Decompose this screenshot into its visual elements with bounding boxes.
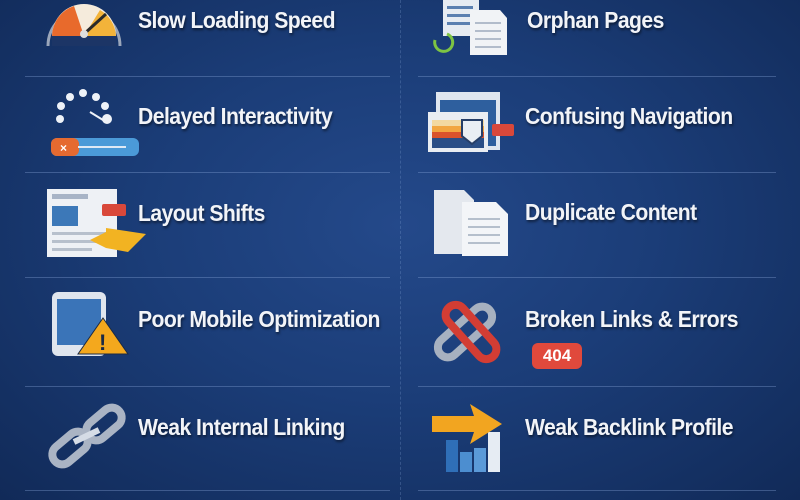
title: Orphan Pages: Orphan Pages	[527, 7, 664, 33]
icon: duplicate content	[434, 190, 508, 256]
title: Slow Loading Speed: Slow Loading Speed	[138, 7, 335, 33]
icon: confusing navigation	[428, 92, 514, 152]
icon: mobile warning	[52, 292, 129, 356]
title: Duplicate Content: Duplicate Content	[525, 199, 697, 225]
badge: 404: 404	[543, 346, 571, 365]
title: Weak Backlink Profile: Weak Backlink Profile	[525, 414, 733, 440]
icon: speedometer	[46, 4, 122, 46]
icon: chain links	[48, 404, 126, 468]
icon: delayed interactivity	[51, 89, 139, 156]
icon: orphan pages	[433, 0, 507, 55]
title: Confusing Navigation: Confusing Navigation	[525, 103, 733, 129]
icon: layout shifts	[47, 189, 146, 257]
badge: 404	[532, 343, 582, 369]
icon: mobile warning: !	[99, 330, 106, 355]
title: Layout Shifts: Layout Shifts	[138, 200, 265, 226]
icon: delayed interactivity: ×	[60, 141, 67, 155]
title: Delayed Interactivity: Delayed Interactivity	[138, 103, 332, 129]
icon: backlink chart with arrow	[432, 404, 502, 472]
icon: broken links	[434, 300, 500, 364]
title: Broken Links & Errors: Broken Links & Errors	[525, 306, 738, 332]
title: Poor Mobile Optimization: Poor Mobile Optimization	[138, 306, 380, 332]
title: Weak Internal Linking: Weak Internal Linking	[138, 414, 345, 440]
